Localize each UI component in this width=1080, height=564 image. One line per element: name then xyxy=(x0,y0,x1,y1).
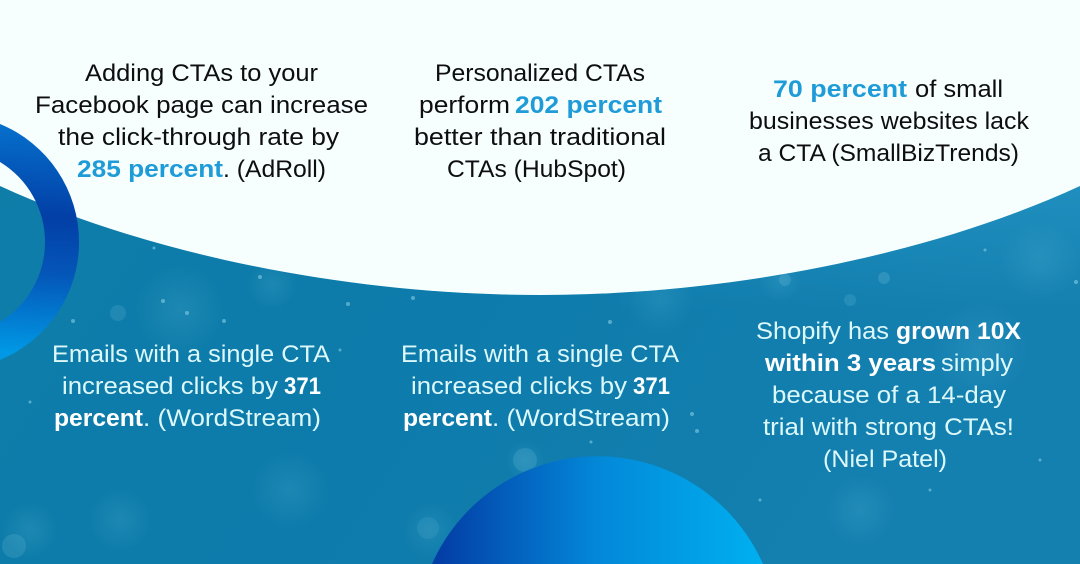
text block: Shopify stat: within 3 years xyxy=(764,350,936,377)
text block: single CTA email stat, left: increased clicks by xyxy=(62,373,278,400)
text block: single CTA email stat, middle xyxy=(401,341,679,432)
decorative ring at left xyxy=(0,124,79,360)
text block: Facebook CTA stat xyxy=(35,60,368,183)
text block: Shopify stat xyxy=(756,318,1021,473)
text block: Shopify stat: grown 10X xyxy=(896,318,1021,345)
text block: Shopify stat: trial with strong CTAs! xyxy=(763,414,1014,441)
text block: Facebook CTA stat: 285 percent xyxy=(77,156,223,183)
text block: Shopify stat: because of a 14-day xyxy=(772,382,1006,409)
text block: small business CTA stat: a CTA (SmallBizTrends) xyxy=(758,140,1019,167)
text block: single CTA email stat, left: Emails with a single CTA xyxy=(52,341,330,368)
text block: Shopify stat: Shopify has xyxy=(756,318,889,345)
text block: Facebook CTA stat: the click-through rate by xyxy=(58,124,339,151)
text block: Facebook CTA stat: Facebook page can increase xyxy=(35,92,368,119)
text block: Shopify stat: (Niel Patel) xyxy=(823,446,947,473)
text block: single CTA email stat, left xyxy=(52,341,330,432)
text block: personalized CTA stat xyxy=(414,60,666,183)
text block: Facebook CTA stat: Adding CTAs to your xyxy=(85,60,318,87)
text block: small business CTA stat: of small xyxy=(915,76,1003,103)
text block: Facebook CTA stat: . (AdRoll) xyxy=(223,156,326,183)
text block: single CTA email stat, middle: increased clicks by xyxy=(411,373,627,400)
white curved top panel xyxy=(0,0,1080,295)
text block: single CTA email stat, middle: Emails with a single CTA xyxy=(401,341,679,368)
text block: small business CTA stat xyxy=(749,76,1030,167)
text block: small business CTA stat: 70 percent xyxy=(773,76,907,103)
text block: single CTA email stat, middle: 371 xyxy=(633,373,670,400)
text block: single CTA email stat, left: 371 xyxy=(284,373,321,400)
text block: personalized CTA stat: CTAs (HubSpot) xyxy=(447,156,626,183)
text block: small business CTA stat: businesses websites lack xyxy=(749,108,1030,135)
text block: personalized CTA stat: Personalized CTAs xyxy=(435,60,645,87)
text block: single CTA email stat, middle: . (WordStream) xyxy=(492,405,670,432)
text block: personalized CTA stat: better than traditional xyxy=(414,124,666,151)
text block: personalized CTA stat: 202 percent xyxy=(515,92,662,119)
text block: personalized CTA stat: perform xyxy=(419,92,510,119)
decorative circle at bottom xyxy=(432,456,763,564)
text block: single CTA email stat, left: . (WordStream) xyxy=(143,405,321,432)
text block: single CTA email stat, middle: percent xyxy=(403,405,492,432)
text block: Shopify stat: simply xyxy=(941,350,1013,377)
text block: single CTA email stat, left: percent xyxy=(54,405,143,432)
